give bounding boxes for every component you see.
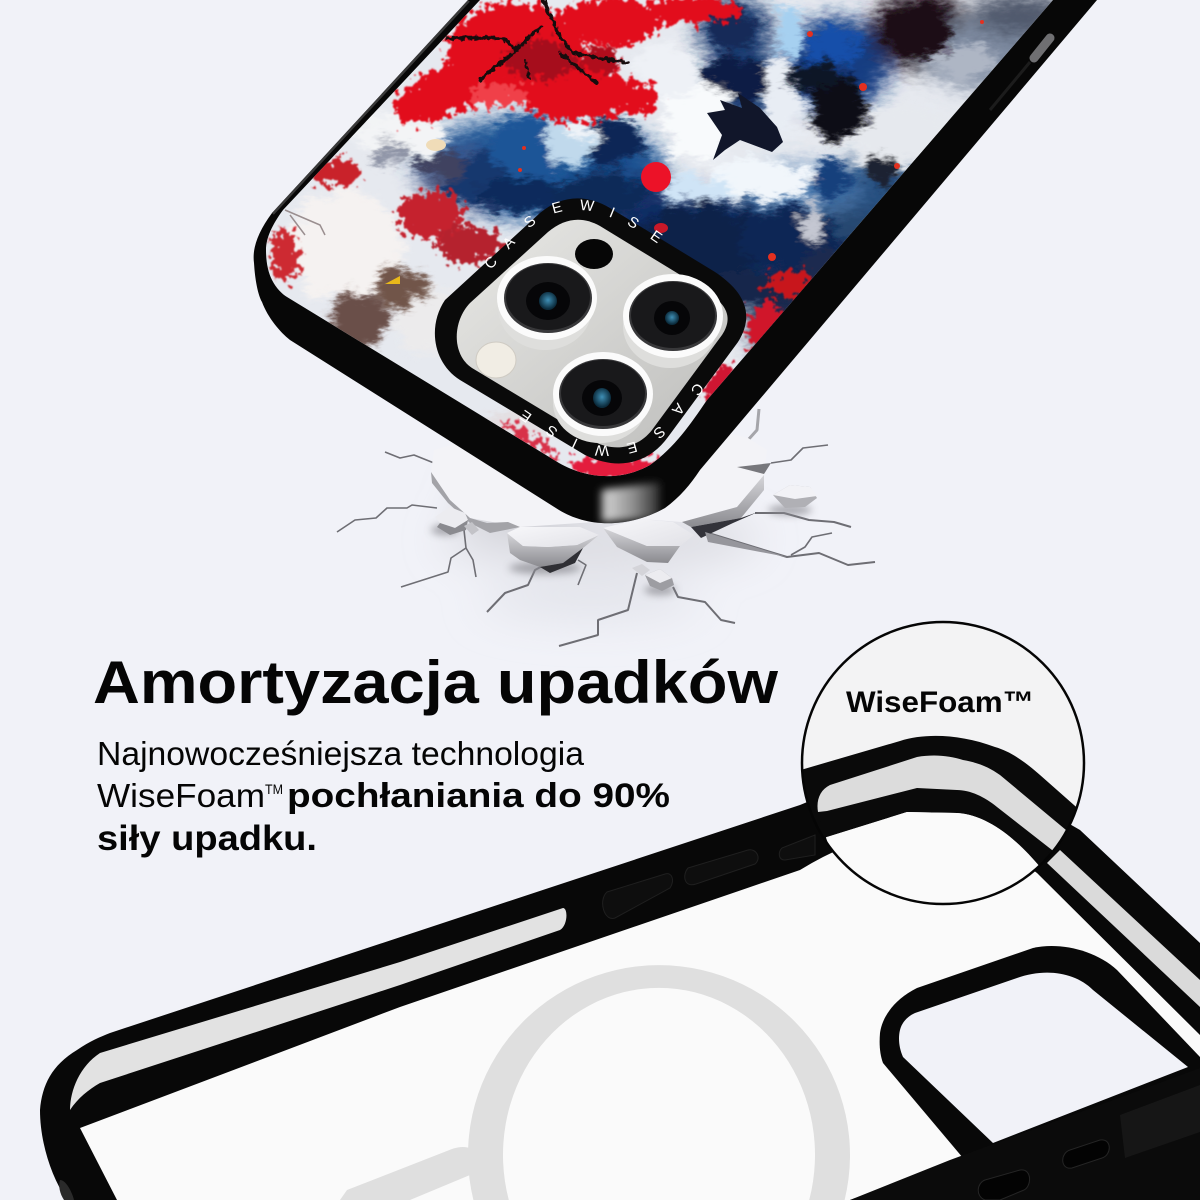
block shadows <box>431 505 812 595</box>
body text: TM <box>265 781 283 797</box>
lens label: WiseFoam™ <box>846 686 1034 719</box>
rim gap left <box>70 908 566 1110</box>
red sun <box>641 162 671 192</box>
bezel lettering bottom <box>517 379 707 459</box>
bumper <box>254 0 1097 523</box>
bezel lettering top: A <box>499 233 519 253</box>
bezel lettering bottom: C <box>687 379 707 399</box>
body text <box>97 735 670 858</box>
red maple foliage <box>271 0 814 481</box>
yellow spark <box>385 276 400 284</box>
bezel lettering top: C <box>481 253 501 273</box>
bezel lettering top: I <box>607 204 617 222</box>
camera cutout opening <box>899 973 1188 1143</box>
dark islands and brown rock <box>330 0 950 348</box>
mic hole <box>575 239 613 269</box>
bezel lettering top: W <box>579 197 596 215</box>
flash <box>476 342 516 378</box>
bezel lettering bottom: I <box>570 434 580 452</box>
camera plateau <box>457 220 728 447</box>
clear case back <box>40 780 1200 1200</box>
body text: Najnowocześniejsza technologia <box>97 735 585 772</box>
magsafe ring <box>468 965 850 1200</box>
heading: Amortyzacja upadków <box>93 649 778 716</box>
camera cutout frame <box>880 946 1200 1158</box>
rubble block right <box>603 519 694 563</box>
pagoda silhouette <box>707 93 783 160</box>
bumper highlight and side button <box>272 0 1050 522</box>
crack lines <box>337 409 875 646</box>
side buttons <box>603 835 815 918</box>
case artwork <box>250 0 1080 490</box>
cracked ground <box>337 400 875 646</box>
body text: pochłaniania do 90% <box>287 777 670 815</box>
bezel lettering bottom: A <box>668 400 688 418</box>
rubble block left <box>507 527 599 573</box>
black frame <box>40 780 1200 1200</box>
lens disc <box>802 622 1084 904</box>
small stones <box>435 485 817 591</box>
body text: WiseFoam <box>97 777 265 814</box>
magnified case corner <box>803 736 1076 865</box>
lens bottom <box>553 352 653 443</box>
bare branches <box>285 210 325 235</box>
bezel lettering top: S <box>521 212 539 232</box>
magsafe alignment pill <box>340 1147 480 1200</box>
bezel lettering bottom: S <box>650 422 668 442</box>
bezel lettering top: E <box>647 227 665 247</box>
clear interior <box>80 831 1200 1200</box>
bezel lettering bottom: E <box>625 437 639 457</box>
plates around the impact <box>431 400 787 557</box>
bezel lettering bottom: S <box>543 421 561 441</box>
phone case <box>250 0 1097 523</box>
soft colour washes <box>415 0 1070 375</box>
brushed paint layers <box>287 0 1070 441</box>
bezel lettering bottom: W <box>594 441 609 459</box>
bezel lettering bottom: E <box>517 406 535 426</box>
lens right <box>623 274 723 368</box>
embers <box>518 20 984 261</box>
lens outline <box>802 622 1084 904</box>
cream lantern <box>426 139 446 151</box>
bezel lettering top: S <box>624 213 642 233</box>
tree branches <box>447 0 627 83</box>
camera bezel <box>435 197 746 463</box>
bezel lettering top: E <box>550 198 564 218</box>
bumper ports <box>59 1085 1200 1200</box>
rim gap right <box>1047 850 1200 1007</box>
magnifier circle <box>800 620 1086 906</box>
lens top left <box>497 256 597 350</box>
body text: siły upadku. <box>97 819 317 858</box>
impact shadow <box>440 478 760 622</box>
painted clouds and ink <box>287 4 997 441</box>
bezel lettering top <box>481 197 665 273</box>
bottom bumper <box>850 1068 1200 1200</box>
